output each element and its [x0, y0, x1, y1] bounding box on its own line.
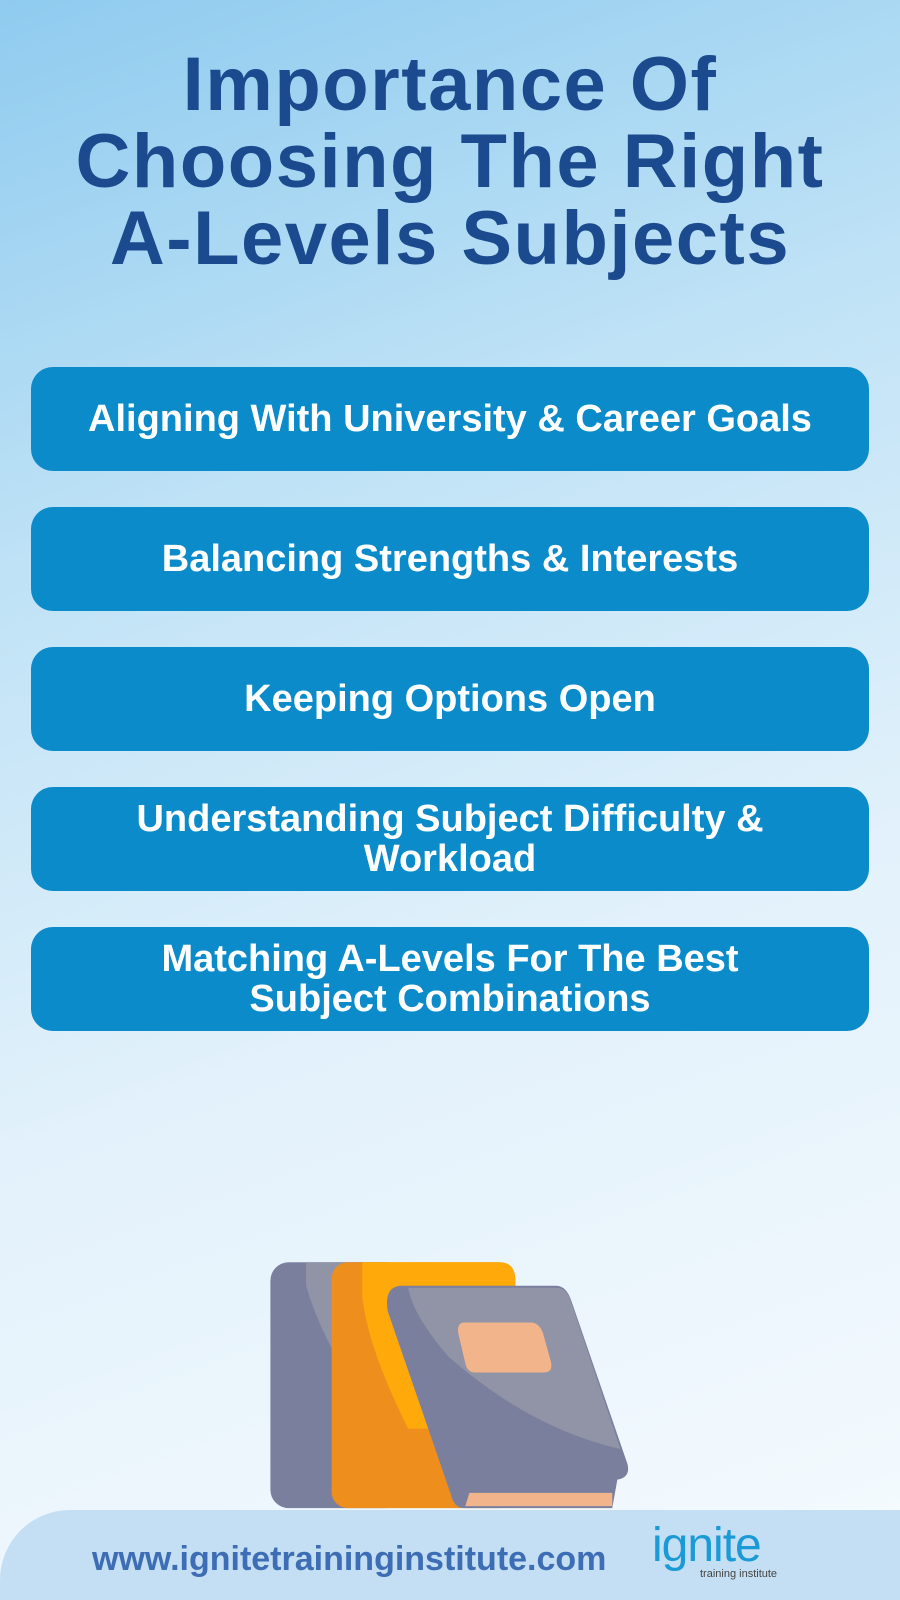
- panel: balancing strengths: [31, 507, 869, 611]
- title: Importance Of: [183, 42, 717, 127]
- title: A-Levels Subjects: [110, 196, 790, 281]
- logo: ignite: ignite: [652, 1519, 761, 1572]
- panel: keeping options open: [31, 647, 869, 751]
- footer band: [0, 1510, 900, 1600]
- panel: subject combinations: [31, 927, 869, 1031]
- panel: subject combinations: Subject Combinations: [249, 978, 651, 1020]
- panel: subject combinations: Matching A-Levels For The Best: [161, 938, 739, 980]
- panel: subject difficulty: [31, 787, 869, 891]
- panel: keeping options open: Keeping Options Open: [244, 678, 656, 720]
- panel: aligning with goals: Aligning With University & Career Goals: [88, 398, 812, 440]
- panel: subject difficulty: Understanding Subject Difficulty &: [136, 798, 764, 840]
- title: [76, 42, 824, 281]
- panel: aligning with goals: [31, 367, 869, 471]
- panel: balancing strengths: Balancing Strengths & Interests: [162, 538, 738, 580]
- url text: www.ignitetraininginstitute.com: [92, 1540, 606, 1578]
- panel: subject difficulty: Workload: [364, 838, 536, 880]
- logo: ignite: training institute: [700, 1568, 777, 1580]
- title: Choosing The Right: [76, 119, 824, 204]
